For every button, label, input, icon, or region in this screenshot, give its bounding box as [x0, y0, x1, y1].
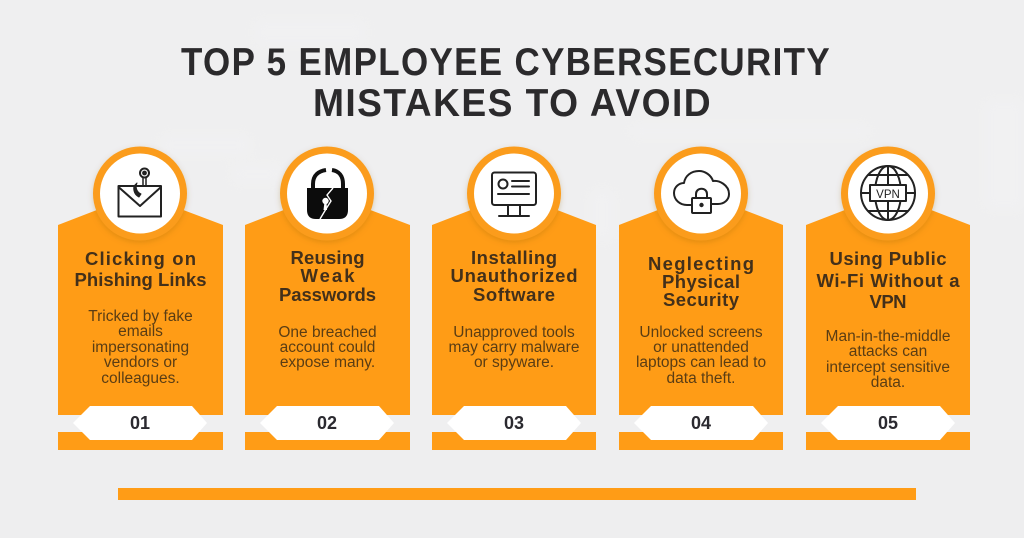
icon: phishing envelope: [118, 168, 161, 216]
panel: clicking on phishing links: [58, 146, 223, 450]
description: data.: [871, 374, 905, 391]
description: emails: [118, 323, 163, 340]
heading: Security: [663, 289, 740, 310]
heading: [648, 253, 754, 310]
panel: using public wi-fi without a vpn: [806, 146, 970, 450]
panel: installing unauthorized software: [432, 146, 596, 450]
heading: VPN: [870, 291, 906, 312]
description: One breached: [278, 324, 377, 341]
icon: computer monitor: [492, 172, 536, 216]
description: Unlocked screens: [639, 324, 763, 341]
number badge: [821, 406, 955, 440]
icon: broken padlock: [307, 170, 348, 219]
icon: vpn globe: VPN: [876, 189, 900, 201]
heading: Neglecting: [648, 253, 754, 274]
number badge: [634, 406, 768, 440]
number badge: [73, 406, 207, 440]
heading: [74, 248, 206, 290]
description: vendors or: [104, 354, 177, 371]
description: [636, 324, 766, 387]
number badge: 01: [130, 413, 150, 433]
description: Unapproved tools: [453, 324, 575, 341]
number badge: [447, 406, 581, 440]
heading: Clicking on: [85, 248, 196, 269]
description: [826, 328, 950, 391]
heading: [279, 247, 376, 305]
description: [449, 324, 579, 371]
panel: reusing weak passwords: [245, 146, 410, 450]
description: account could: [280, 339, 375, 356]
number badge: 04: [691, 413, 711, 433]
number badge: 02: [317, 413, 337, 433]
heading: [816, 248, 960, 312]
description: [278, 324, 377, 371]
description: Man-in-the-middle: [826, 328, 950, 345]
heading: Phishing Links: [74, 269, 206, 290]
heading: Physical: [662, 271, 740, 292]
heading: Using Public: [830, 248, 946, 269]
heading: Installing: [471, 247, 557, 268]
icon: vpn globe: [861, 166, 915, 220]
icon: cloud padlock: [674, 171, 729, 213]
number badge: 05: [878, 413, 898, 433]
description: colleagues.: [101, 370, 180, 387]
heading: [450, 247, 578, 305]
heading: Reusing: [290, 247, 364, 268]
description: intercept sensitive: [826, 359, 950, 376]
description: or spyware.: [474, 354, 554, 371]
description: laptops can lead to: [636, 354, 766, 371]
bottom bar: [118, 488, 916, 500]
description: or unattended: [653, 339, 749, 356]
number badge: [260, 406, 394, 440]
panel: neglecting physical security: [619, 146, 783, 450]
title: [181, 41, 831, 125]
title: TOP 5 EMPLOYEE CYBERSECURITY: [181, 41, 831, 84]
description: Tricked by fake: [88, 308, 193, 325]
description: impersonating: [92, 339, 189, 356]
description: expose many.: [280, 354, 375, 371]
title: MISTAKES TO AVOID: [313, 82, 712, 125]
description: may carry malware: [449, 339, 579, 356]
description: data theft.: [667, 370, 735, 387]
heading: Software: [473, 284, 555, 305]
heading: Wi-Fi Without a: [816, 270, 960, 291]
description: attacks can: [849, 343, 927, 360]
number badge: 03: [504, 413, 524, 433]
heading: Unauthorized: [450, 265, 578, 286]
heading: Passwords: [279, 284, 376, 305]
description: [88, 308, 193, 387]
heading: Weak: [300, 265, 355, 286]
